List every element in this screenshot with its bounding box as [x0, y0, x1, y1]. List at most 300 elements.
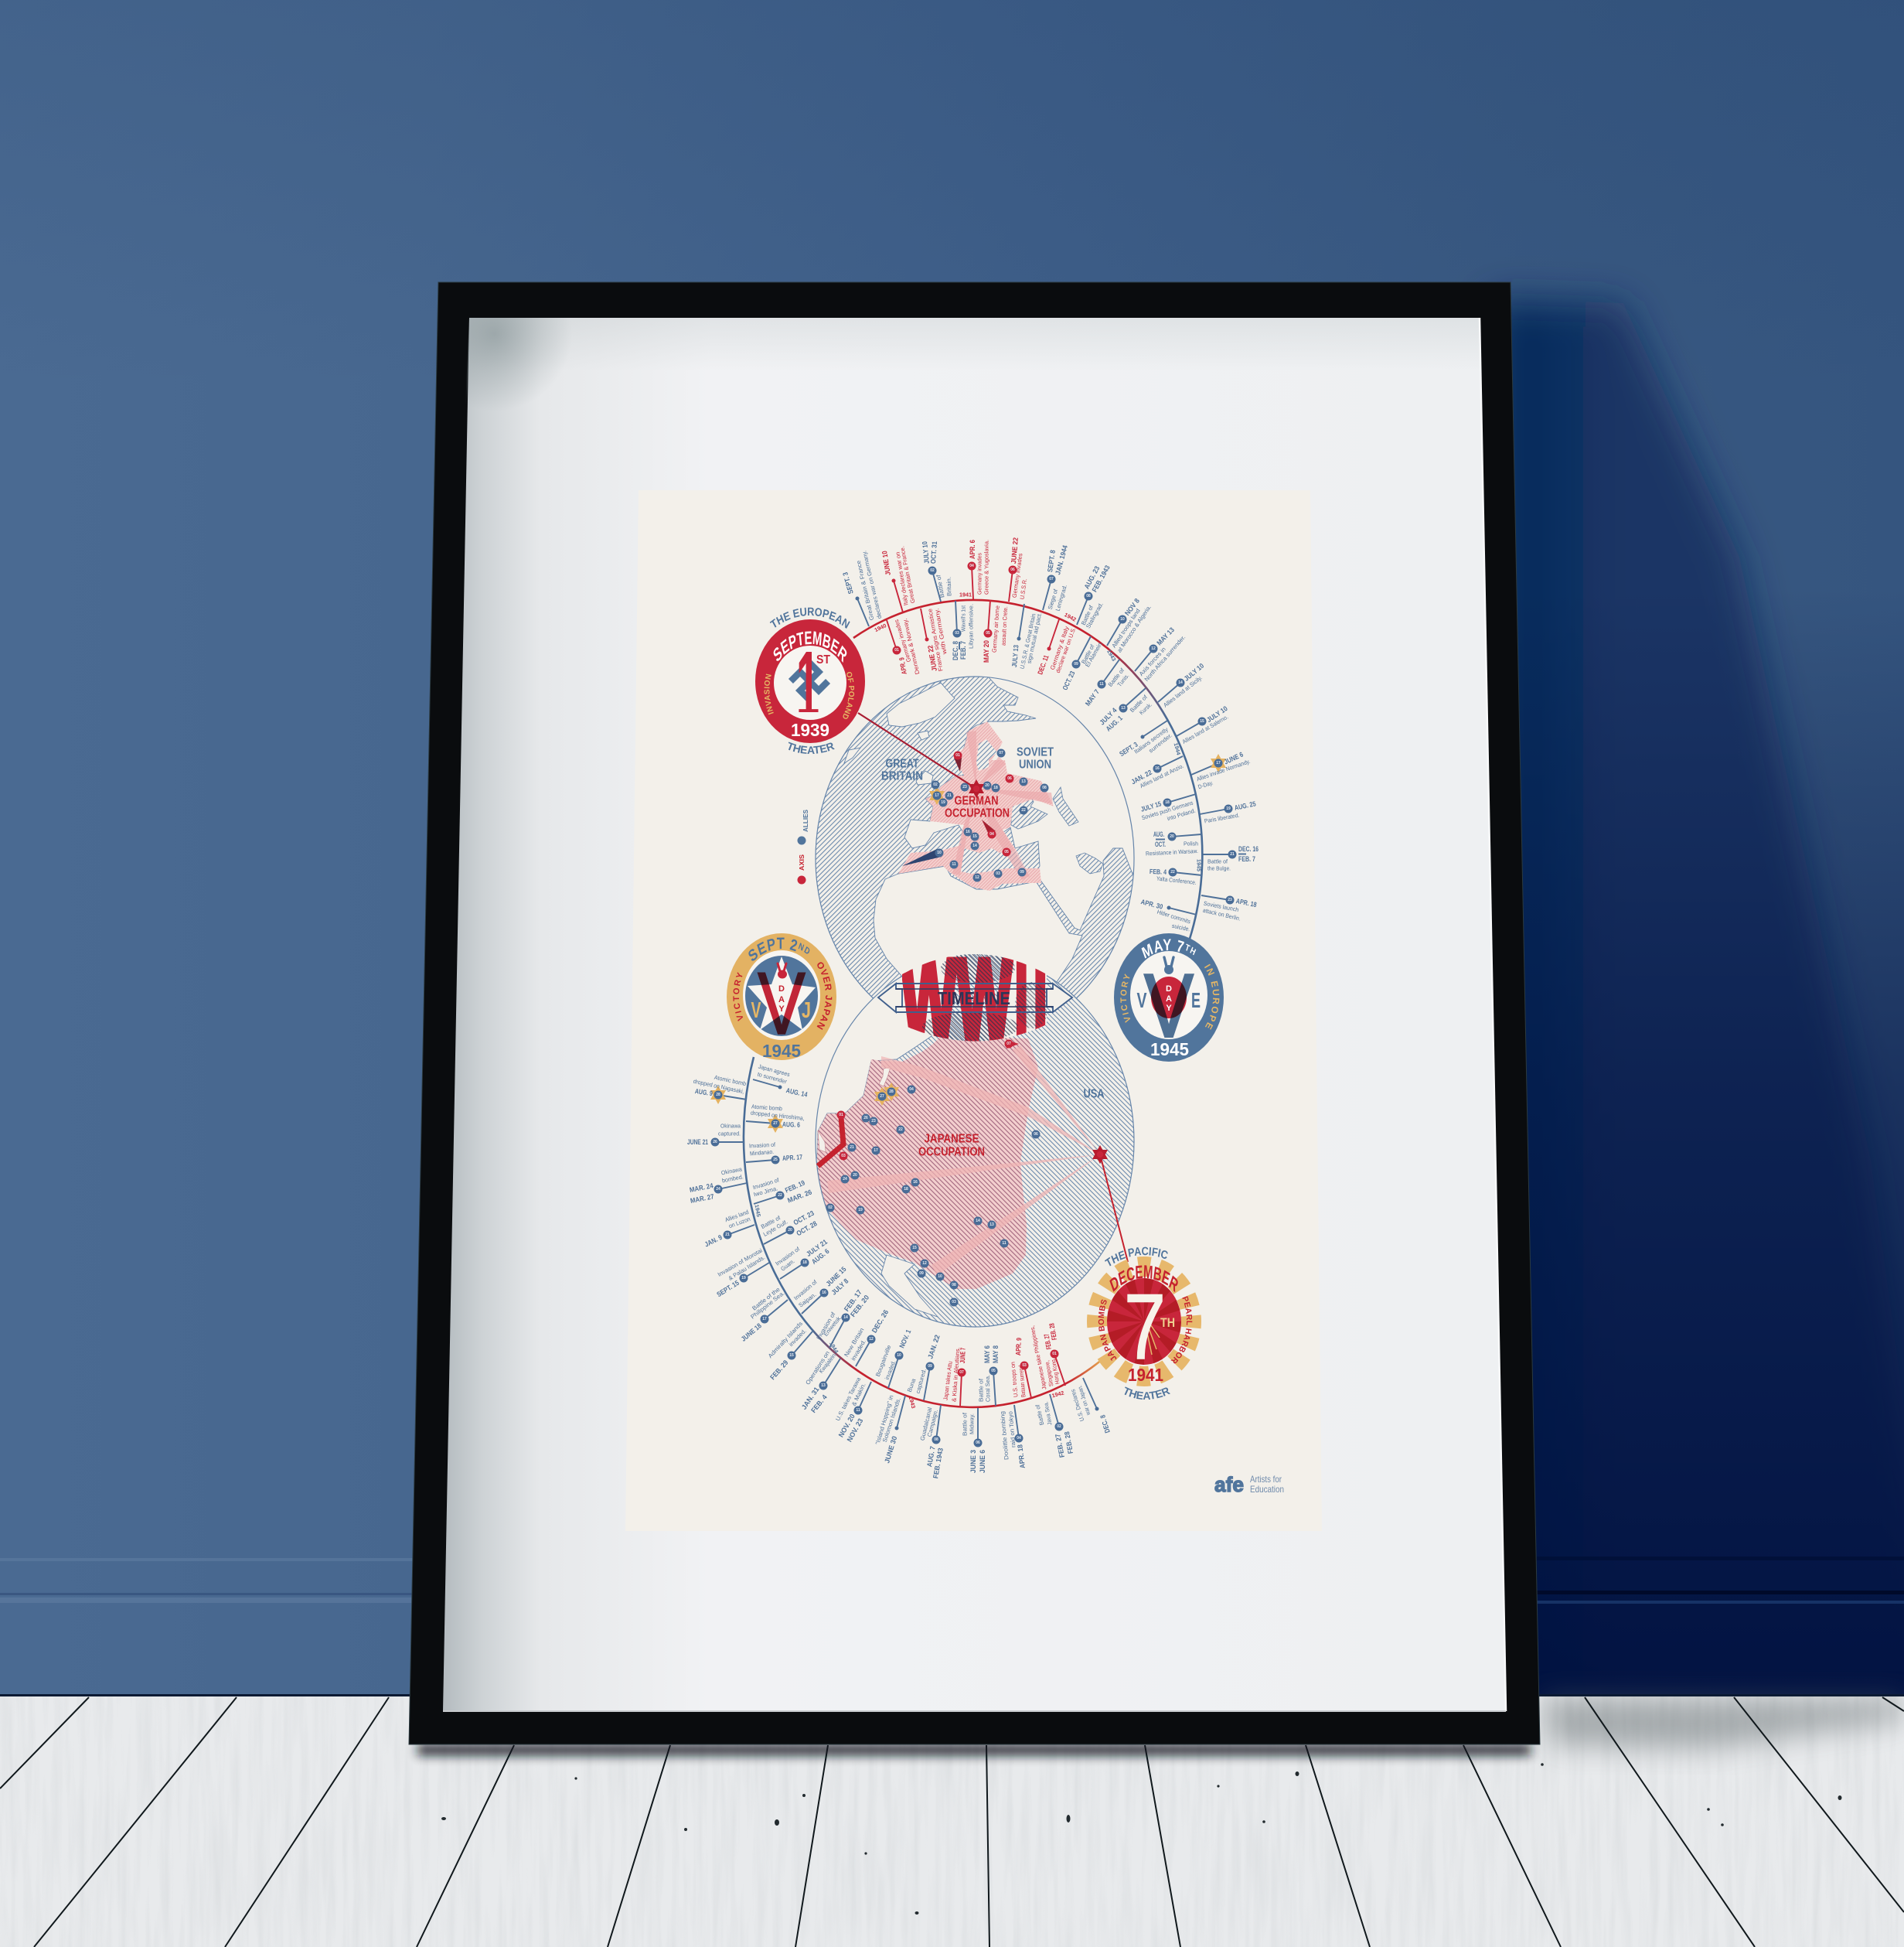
map labels: BRITAIN [881, 770, 923, 783]
map markers: Europe: 19 [941, 800, 945, 805]
event: June 10, Italy declares war: Great Britain & France. [898, 546, 916, 604]
event: Doolittle bombing raid: raid on Tokyo [1006, 1411, 1017, 1447]
event: US takes Tarawa and Makin [834, 1376, 871, 1443]
map markers: Axis in Pacific [836, 1039, 1108, 1164]
event: June 7, Japan takes Attu and Kiska: & Kiska in Aleutians. [951, 1347, 961, 1402]
logo: Artists for Education: Artists for [1250, 1474, 1282, 1485]
event: April 9, Germany invades Denmark and Norway: APR. 9 [898, 656, 908, 675]
event: Allies land on Luzon: 21 [725, 1233, 730, 1237]
event: Dec 11, Germany and Italy declare war on US: 1942 [1063, 612, 1077, 623]
event: Battle of Kursk: JULY 4 [1098, 706, 1119, 727]
event: Battle of the Bulge: FEB. 7 [1238, 855, 1255, 863]
event: Guadalcanal Campaign: 08 [934, 1437, 938, 1442]
event: June 6, D-Day: JUNE 6 [1223, 750, 1245, 766]
event: Polish resistance in Warsaw: OCT. [1155, 841, 1166, 848]
WWII title lens: II [1012, 935, 1050, 1068]
logo: Artists for Education: afe [1214, 1473, 1244, 1496]
floorboards [0, 1694, 1904, 1947]
event: Battle of Kursk [1098, 688, 1153, 733]
event: Okinawa bombed: MAR. 27 [690, 1192, 714, 1205]
map markers: Axis in Europe: 05 [1004, 850, 1009, 854]
badge: December 7th 1941, Pacific theater: THE PACIFIC [1105, 1246, 1168, 1267]
map markers: Pacific: 16 [913, 1180, 918, 1185]
event: Battle of El Alamein: OCT. 23 [1061, 670, 1077, 691]
event: Nov 8, Allied landings in North Africa: NOV 8 [1123, 597, 1141, 617]
badge: V-J Day, Sept 2nd 1945: OVER JAPAN [816, 962, 832, 1030]
event: June 7, Japan takes Attu and Kiska [942, 1347, 967, 1407]
subtitle: timeline: TIMELINE [938, 988, 1010, 1008]
event: Siege of Leningrad: SEPT. 8 [1046, 550, 1057, 573]
event: April 9, Germany invades Denmark and Norway: 1940 [874, 623, 887, 633]
event: Battle of Tunis: MAY 7 [1084, 688, 1101, 708]
map labels: USA [1084, 1087, 1105, 1101]
event: Invasion of Saipan: Invasion of [792, 1278, 819, 1301]
event: Soviets attack Berlin [1201, 895, 1257, 922]
event: June 22, Germany invades USSR: U.S.S.R. [1019, 578, 1028, 600]
event: Dec 8, US declares war on Japan: war on Japan. [1076, 1384, 1092, 1417]
badge: V-E Day, May 7th 1945: IN EUROPE [1204, 963, 1220, 1030]
map markers: Pacific: 11 [1002, 1241, 1006, 1246]
event: Invasion of Morotai and Palau: 19 [741, 1276, 746, 1280]
map markers: Pacific: 13 [989, 1222, 994, 1227]
map markers: Europe: 09 [1020, 870, 1024, 875]
logo: Artists for Education [1214, 1473, 1284, 1496]
event: April 6, Germany invades Greece and Yugoslavia: APR. 6 [969, 540, 976, 559]
event: Japanese take Philippines, Singapore, Hong Kong: FEB. 28 [1047, 1322, 1058, 1341]
event: Aug 14, Japan agrees to surrender [753, 1063, 808, 1099]
event: June 10, Italy declares war: Italy declares war on [894, 551, 909, 606]
map labels: OCCUPATION [945, 807, 1010, 820]
event: Operations on Kwajalein: Operations on [804, 1350, 831, 1386]
event: Admiralty Islands invaded: FEB. 29 [768, 1359, 789, 1381]
event: Okinawa bombed [689, 1165, 747, 1205]
event: June 22, Germany invades USSR: JUNE 22 [1010, 537, 1020, 564]
legend: allies and axis: ALLIES [802, 810, 809, 832]
event: Battle of Tunis: 1943 [1105, 649, 1116, 663]
event: June 22, France signs armistice: with Germany. [933, 608, 949, 656]
event: Polish resistance in Warsaw [1146, 830, 1201, 857]
event: June 22, Germany invades USSR: Germany invades [1011, 553, 1024, 598]
event: June 7, Japan takes Attu and Kiska: 07 [959, 1370, 964, 1375]
event: Battle of Midway: 06 [976, 1441, 980, 1445]
event: Hitler commits suicide: Hitler commits [1156, 909, 1192, 926]
event: Aug 9, Nagasaki: 28 [716, 1093, 720, 1097]
event: June 22, France signs armistice: France signs Armistice [926, 608, 944, 672]
event: June 21, Okinawa captured: 26 [713, 1140, 717, 1144]
map markers: Europe: 11 [952, 862, 956, 867]
event: Island hopping in Solomons: Solomon Islands. [881, 1397, 902, 1443]
event: May 20, assault on Crete: 1941 [959, 592, 972, 598]
event: Hitler commits suicide: suicide. [1171, 922, 1190, 933]
event: Battle of the Philippine Sea [740, 1286, 788, 1343]
event: Okinawa bombed: 24 [716, 1187, 720, 1192]
event: Battle of Leyte Gulf: Battle of [760, 1214, 782, 1230]
map markers: Pacific: 17 [874, 1148, 878, 1153]
event: Battle of Britain: Battle of [935, 574, 945, 598]
occupation movement bands [952, 731, 1053, 880]
event: Aug 9, Nagasaki: Atomic bomb [714, 1074, 747, 1087]
event: Yalta Conference: FEB. 4 [1150, 868, 1167, 876]
WWII title lens: WW [901, 935, 1012, 1068]
event: Battle of the Bulge: the Bulge. [1207, 864, 1231, 872]
event: Wavell's 1st Libyan offensive: FEB. 7 [959, 641, 967, 660]
event: Admiralty Islands invaded [767, 1320, 812, 1381]
event: Battle of the Bulge: Battle of [1207, 858, 1228, 864]
map labels [881, 745, 1105, 1158]
event: Aug 14, Japan agrees to surrender: Japan agrees [758, 1063, 791, 1078]
event: Battle of Kursk: 13 [1121, 706, 1126, 711]
event: Aug 6, Hiroshima: AUG. 6 [782, 1120, 800, 1129]
line from Pearl Harbor star to December badge [1100, 1154, 1128, 1262]
event: Allies land on Luzon [703, 1204, 761, 1248]
event: June 21, Okinawa captured: Okinawa [720, 1123, 741, 1129]
map markers: Europe: 15 [972, 834, 977, 839]
event: July 13, USSR and Britain pact [1010, 604, 1043, 670]
event: Japanese take Philippines, Singapore, Hong Kong: Hong Kong. [1050, 1358, 1061, 1385]
event: Battle of Coral Sea: Coral Sea. [984, 1375, 991, 1402]
map markers: Europe: 17 [935, 793, 939, 798]
logo: Artists for Education: Education [1250, 1484, 1284, 1495]
badge: V-J Day, Sept 2nd 1945: J [802, 998, 811, 1023]
event: Aug 6, Hiroshima: 27 [773, 1121, 778, 1126]
event: Guadalcanal Campaign [919, 1405, 945, 1479]
map markers: Europe: 08 [1042, 786, 1047, 790]
map markers: Axis in Pacific: 07 [1006, 1042, 1011, 1046]
event: Sept 3, Britain and France declare war: SEPT. 3 [841, 571, 855, 595]
badge: V-E Day, May 7th 1945: TH [1186, 943, 1197, 956]
badge: V-J Day, Sept 2nd 1945: Y [778, 1004, 785, 1014]
badge: September 1st 1939, European theater: ST [816, 653, 830, 667]
badge: V-E Day, May 7th 1945: 1945 [1150, 1039, 1189, 1059]
event: Island hopping in Solomons: JUNE 30 [883, 1435, 898, 1464]
event: Paris liberated [1200, 800, 1256, 824]
map markers: Pacific: 02 [828, 1205, 833, 1210]
event: Dec 8, US declares war on Japan: DEC. 8 [1098, 1414, 1112, 1434]
event: Invasion of Eniwetok [815, 1288, 870, 1348]
event: Battle of Java Sea [1034, 1394, 1075, 1458]
event: Paris liberated: AUG. 25 [1234, 800, 1256, 812]
event: Admiralty Islands invaded: Admiralty Islands [767, 1320, 804, 1359]
event: May 20, assault on Crete [959, 592, 1009, 663]
event: April 9, Germany invades Denmark and Norway: Germany invades [893, 619, 912, 663]
event: Wavell's 1st Libyan offensive [952, 601, 974, 660]
event: Battle of Java Sea: Java Sea. [1042, 1401, 1053, 1426]
event: US takes Tarawa and Makin: U.S. takes Tarawa [834, 1376, 863, 1422]
event: Admiralty Islands invaded: 15 [789, 1353, 794, 1358]
event: Battle of Tunis: Tunis. [1116, 672, 1130, 688]
event: Aug 6, Hiroshima: dropped on Hiroshima, [751, 1110, 805, 1122]
event: Battle of El Alamein: El Alamein. [1084, 640, 1104, 668]
event: Battle of Java Sea: Battle of [1034, 1403, 1045, 1426]
event: July 13, USSR and Britain pact: sign mutual aid pact. [1026, 612, 1043, 664]
event: Invasion of Morotai and Palau [715, 1246, 769, 1298]
map markers: Axis in Europe [954, 752, 1014, 857]
map markers: Axis in Europe: 04 [989, 832, 994, 837]
Pacific timeline events [687, 1063, 1112, 1479]
event: May 20, assault on Crete: assault on Crete. [1000, 606, 1009, 646]
event: Battle of Stalingrad: Battle of [1080, 604, 1095, 626]
map markers: Europe: 16 [966, 830, 970, 834]
map markers: Axis in Pacific: 03 [841, 1154, 846, 1158]
event: Okinawa bombed: Okinawa [720, 1165, 743, 1176]
event: Battle of Kursk: AUG. 1 [1105, 714, 1124, 733]
event: Battle of Stalingrad: FEB. 1943 [1091, 564, 1112, 593]
upper globe: European map [815, 676, 1135, 998]
event: Operations on Kwajalein: JAN. 31 [800, 1386, 821, 1411]
event: Battle of Leyte Gulf: Leyte Gulf. [762, 1219, 789, 1238]
event: Soviets attack Berlin: APR. 18 [1235, 897, 1257, 909]
event: Battle of Britain: OCT. 31 [929, 541, 938, 564]
legend: allies and axis [798, 810, 809, 885]
event: May 13, Axis surrender in North Africa: North Africa surrender. [1143, 634, 1187, 683]
badge: V-E Day, May 7th 1945: A [1166, 994, 1172, 1004]
event: New Britain invaded: New Britain [843, 1327, 865, 1358]
event: Battle of Stalingrad [1077, 564, 1112, 629]
map markers: Europe: 03 [996, 871, 1000, 876]
event: Bougainville invaded: 10 [897, 1353, 901, 1358]
map markers: Pacific: 19 [858, 1208, 863, 1212]
event: Battle of Leyte Gulf: 20 [788, 1228, 792, 1233]
event: Allies land at Anzio: 16 [1155, 766, 1160, 771]
event: Soviets push Germans into Poland: Soviets push Germans [1141, 799, 1194, 821]
map markers: Europe: 02 [933, 783, 938, 787]
event: Invasion of Iwo Jima: Iwo Jima. [753, 1185, 778, 1198]
event: Invasion of Guam: 18 [802, 1260, 807, 1265]
event: April 6, Germany invades Greece and Yugoslavia [968, 540, 989, 599]
event: May 20, assault on Crete: 05 [986, 631, 990, 636]
event: April 17, Mindanao: APR. 17 [782, 1153, 802, 1162]
event: Invasion of Morotai and Palau: Invasion of Morotai [717, 1246, 764, 1278]
event: Sept 3, Britain and France declare war [841, 550, 883, 626]
map markers: Pacific: 20 [853, 1173, 857, 1178]
badge: December 7th 1941, Pacific theater [1097, 1244, 1194, 1402]
German occupied territory [898, 721, 1054, 891]
badge: December 7th 1941, Pacific theater: JAPAN BOMBS [1098, 1299, 1116, 1361]
event: Soviets attack Berlin: attack on Berlin. [1202, 907, 1242, 922]
badge: December 7th 1941, Pacific theater: DECEMBER [1109, 1265, 1178, 1293]
event: June 21, Okinawa captured [687, 1123, 744, 1146]
event: Battle of the Philippine Sea: JUNE 18 [740, 1321, 763, 1343]
event: Sept 3, Italians surrender [1118, 721, 1181, 758]
map markers: Pacific: 22 [898, 1127, 903, 1132]
event: Battle of Java Sea: FEB. 28 [1063, 1431, 1075, 1454]
event: Japanese take Philippines, Singapore, Hong Kong: Singapore, [1044, 1360, 1054, 1387]
year marker 1942: 1942 [1051, 1390, 1064, 1399]
map markers: Pacific: 27 [880, 1094, 884, 1099]
event: Battle of Stalingrad: Stalingrad. [1085, 601, 1105, 629]
event: Aug 9, Nagasaki: dropped on Nagasaki, [693, 1078, 744, 1095]
badge: September 1st 1939, European theater [755, 608, 865, 754]
map markers: Pacific: 15 [912, 1246, 917, 1250]
event: Japanese take Philippines, Singapore, Hong Kong: Japanese take Philippines, [1029, 1325, 1047, 1390]
event: May 20, assault on Crete: MAY 20 [983, 640, 990, 663]
event: Battle of Coral Sea: 05 [991, 1369, 996, 1373]
map labels: OCCUPATION [918, 1146, 985, 1158]
event: Battle of Tunis [1084, 649, 1130, 708]
event: Bougainville invaded: NOV. 1 [898, 1328, 912, 1349]
event: Invasion of Guam: AUG. 6 [810, 1247, 831, 1266]
event: Bougainville invaded: Bougainville [874, 1344, 893, 1378]
event: Invasion of Guam: JULY 21 [805, 1238, 829, 1258]
event: Yalta Conference [1150, 859, 1202, 886]
European timeline arc [853, 600, 1202, 943]
poster sheet [625, 490, 1322, 1531]
event: Admiralty Islands invaded: invaded. [788, 1328, 808, 1348]
badge: December 7th 1941, Pacific theater: TH [1160, 1315, 1175, 1330]
event: Allies land at Sicily: Allies land at Sicily. [1162, 674, 1204, 709]
map markers: Europe: 18 [993, 786, 998, 790]
event: Aug 14, Japan agrees to surrender: AUG. 14 [785, 1086, 808, 1099]
event: Invasion of Saipan: 16 [822, 1291, 826, 1295]
event: Invasion of Saipan: Saipan. [797, 1291, 817, 1309]
event: Allies land at Salerno: Allies land at Salerno. [1181, 714, 1229, 745]
lower globe: Pacific map [808, 951, 1136, 1330]
Japanese occupied territory [817, 1036, 1038, 1289]
event: Invasion of Iwo Jima: MAR. 26 [786, 1188, 813, 1205]
event: June 7, Japan takes Attu and Kiska: JUNE 7 [959, 1348, 967, 1363]
event: Okinawa bombed: bombed. [721, 1173, 744, 1184]
event: Battle of Midway: Midway. [968, 1413, 976, 1434]
map markers: Axis in Pacific: 01 [839, 1113, 843, 1117]
icon: victory hand [778, 963, 787, 979]
event: Polish resistance in Warsaw: Resistance in Warsaw. [1146, 847, 1198, 857]
event: Bougainville invaded: invaded. [884, 1359, 898, 1381]
event: Battle of the Bulge [1203, 845, 1259, 872]
event: Sept 3, Italians surrender: SEPT. 3 [1118, 741, 1139, 758]
event: Battle of Coral Sea: Battle of [977, 1378, 985, 1402]
event: Doolittle bombing raid: Doolittle bombing [999, 1411, 1010, 1460]
event: Soviets push Germans into Poland: JULY 15 [1140, 800, 1162, 813]
event: June 10, Italy declares war [880, 546, 916, 612]
event: June 22, Germany invades USSR: 06 [1010, 568, 1015, 572]
event: April 17, Mindanao: Invasion of [749, 1141, 776, 1149]
event: Sept 3, Britain and France declare war: declares war on Germany. [860, 550, 883, 619]
event: Buna captured [906, 1334, 942, 1400]
event: Yalta Conference: 22 [1170, 870, 1175, 875]
event: Operations on Kwajalein: FEB. 4 [809, 1393, 829, 1414]
map markers: Pacific: 26 [863, 1116, 868, 1120]
event: Battle of Leyte Gulf [760, 1209, 819, 1244]
map markers: Europe: 10 [937, 851, 942, 855]
badge: September 1st 1939, European theater: 1 [796, 631, 819, 740]
event: Invasion of Morotai and Palau: & Palau Islands. [727, 1254, 766, 1282]
event: Battle of Britain [921, 541, 952, 602]
event: May 13, Axis surrender in North Africa: MAY 13 [1155, 626, 1176, 646]
badge: V-J Day, Sept 2nd 1945: A [778, 995, 785, 1004]
map markers: Europe: 23 [962, 785, 967, 789]
poster artwork [687, 537, 1284, 1496]
event: Battle of Midway [962, 1408, 986, 1473]
event: Okinawa bombed: MAR. 24 [689, 1181, 714, 1194]
event: Invasion of Iwo Jima [752, 1176, 813, 1205]
event: Soviets attack Berlin: Soviets launch [1203, 900, 1239, 913]
Pacific timeline arc [744, 1057, 1102, 1407]
map markers: Pacific: 03 [952, 1300, 956, 1304]
map markers: Pacific: 21 [850, 1145, 854, 1150]
event: Doolittle bombing raid: 04 [1017, 1436, 1021, 1441]
event: Siege of Leningrad: Leningrad. [1054, 584, 1068, 612]
event: New Britain invaded: DEC. 26 [870, 1308, 890, 1335]
event: Invasion of Eniwetok: FEB. 17 [843, 1288, 863, 1313]
event: Allies land at Anzio: JAN. 22 [1130, 769, 1153, 786]
map markers: Pacific: 10 [938, 1274, 942, 1279]
event: April 9, Bataan surrender: 03 [1022, 1363, 1027, 1368]
event: Bougainville invaded [874, 1328, 912, 1388]
event: Battle of Midway: JUNE 6 [979, 1450, 986, 1473]
event: Invasion of Iwo Jima: FEB. 19 [784, 1178, 806, 1195]
map markers: Europe: 12 [975, 875, 979, 880]
badge: December 7th 1941, Pacific theater: 1941 [1128, 1365, 1163, 1385]
badge: December 7th 1941, Pacific theater: PEARL HARBOR [1170, 1296, 1192, 1364]
map markers: Pacific: 08 [952, 1283, 956, 1287]
badge: V-J Day, Sept 2nd 1945: SEPT 2 [748, 937, 798, 961]
event: Paris liberated: 19 [1226, 806, 1231, 811]
event: Guadalcanal Campaign: Guadalcanal [919, 1407, 933, 1441]
event: May 13, Axis surrender in North Africa: Axis forces in [1138, 646, 1167, 677]
event: Battle of Britain: 02 [930, 568, 935, 573]
event: Invasion of Saipan [792, 1265, 850, 1314]
badge: December 7th 1941, Pacific theater: 7 [1124, 1275, 1166, 1379]
event: April 17, Mindanao: Mindanao. [750, 1148, 774, 1157]
map markers: Europe: 22 [1021, 808, 1026, 813]
badge: September 1st 1939, European theater: THE EUROPEAN [770, 608, 850, 629]
event: Buna captured: captured. [915, 1368, 928, 1394]
map labels: UNION [1019, 758, 1051, 772]
event: Siege of Leningrad: JAN. 1944 [1054, 544, 1069, 575]
badge: V-J Day, Sept 2nd 1945: V [758, 955, 806, 1053]
event: Dec 11, Germany and Italy declare war on US: declare war on U.S. [1054, 626, 1077, 674]
event: Guadalcanal Campaign: AUG. 7 [925, 1446, 937, 1468]
event: April 9, Bataan surrender: APR. 9 [1014, 1338, 1023, 1355]
event: Allies land at Anzio: Allies land at Anzio. [1139, 762, 1185, 789]
event: June 6, D-Day [1191, 750, 1251, 790]
badge: September 1st 1939, European theater: INVASION [764, 674, 774, 714]
event: Aug 6, Hiroshima [746, 1103, 805, 1133]
event: Battle of Midway: JUNE 3 [969, 1450, 977, 1473]
badge: V-J Day, Sept 2nd 1945: 1945 [762, 1041, 801, 1061]
event: US takes Tarawa and Makin: NOV. 20 [837, 1413, 857, 1438]
event: Doolittle bombing raid: APR. 18 [1016, 1444, 1027, 1469]
badge: V-E Day, May 7th 1945: E [1191, 988, 1201, 1012]
event: Buna captured: Buna [906, 1377, 918, 1393]
badge: September 1st 1939, European theater: SEPTEMBER [773, 631, 847, 663]
event: US takes Tarawa and Makin: & Makin. [850, 1382, 867, 1407]
event: Japanese take Philippines, Singapore, Hong Kong [1029, 1322, 1065, 1390]
event: Invasion of Iwo Jima: Invasion of [752, 1176, 781, 1191]
event: Battle of El Alamein [1061, 636, 1104, 691]
badge: V-J Day, Sept 2nd 1945: VICTORY [733, 972, 743, 1021]
map labels: SOVIET [1017, 745, 1054, 759]
map markers: Europe: 20 [985, 783, 989, 788]
event: New Britain invaded [843, 1308, 890, 1366]
map markers: Pacific: 23 [871, 1119, 876, 1124]
event: Aug 6, Hiroshima: Atomic bomb [751, 1103, 782, 1112]
event: Battle of Britain: JULY 10 [921, 541, 931, 564]
event: Allies land on Luzon: on Luzon [727, 1216, 751, 1229]
badge: September 1st 1939, European theater: THEATER [789, 742, 835, 754]
map markers: Europe [902, 748, 1048, 881]
event: Doolittle bombing raid [999, 1405, 1027, 1469]
event: Polish resistance in Warsaw: Polish [1184, 840, 1198, 847]
event: June 10, Italy declares war: JUNE 10 [880, 551, 892, 576]
event: Battle of Java Sea: 02 [1057, 1424, 1061, 1429]
event: July 13, USSR and Britain pact: U.S.S.R. & Great Britain [1019, 613, 1037, 670]
event: Operations on Kwajalein: Kwajalein. [817, 1351, 838, 1375]
event: Operations on Kwajalein [800, 1341, 840, 1414]
event: Siege of Leningrad [1043, 544, 1069, 612]
event: Allies land at Salerno: JULY 10 [1205, 704, 1229, 724]
event: Dec 8, US declares war on Japan [1069, 1378, 1112, 1434]
